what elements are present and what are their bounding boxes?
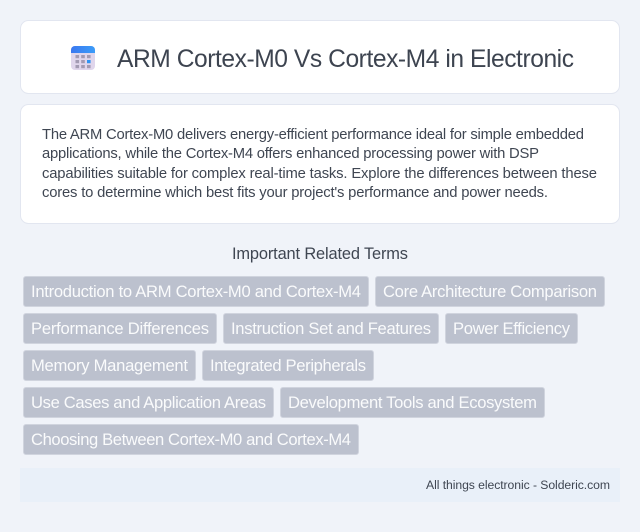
intro paragraph	[42, 127, 597, 201]
tag: memory management: Memory Management	[31, 356, 188, 375]
panel: header	[20, 20, 620, 94]
tag: use cases: Use Cases and Application Areas	[31, 393, 266, 412]
intro paragraph: cores to determine which best fits your project's performance and power needs.	[42, 185, 548, 201]
tag: introduction	[24, 276, 368, 306]
footer	[20, 468, 620, 502]
tag: core architecture: Core Architecture Comparison	[383, 282, 597, 301]
tag: performance	[24, 314, 216, 344]
tag: instruction set: Instruction Set and Features	[231, 319, 431, 338]
panel: intro text	[20, 104, 620, 224]
tag: power efficiency	[446, 314, 578, 344]
intro paragraph: applications, while the Cortex-M4 offers enhanced processing power with DSP	[42, 146, 539, 162]
tag: choosing: Choosing Between Cortex-M0 and Cortex-M4	[31, 430, 351, 449]
tag: power efficiency: Power Efficiency	[453, 319, 571, 338]
tag: introduction: Introduction to ARM Cortex-M0 and Cortex-M4	[31, 282, 361, 301]
title: ARM Cortex-M0 Vs Cortex-M4 in Electronic	[117, 46, 574, 73]
tag: memory management	[24, 350, 196, 380]
intro paragraph: capabilities suitable for complex real-time tasks. Explore the differences between these	[42, 166, 597, 182]
tag list	[24, 276, 604, 454]
tag: core architecture	[376, 276, 604, 306]
tag: integrated peripherals: Integrated Peripherals	[210, 356, 366, 375]
tag: use cases	[24, 388, 274, 418]
tag: development tools: Development Tools and Ecosystem	[288, 393, 537, 412]
footer credit: All things electronic - Solderic.com	[426, 478, 610, 492]
tag: choosing	[24, 424, 358, 454]
intro paragraph: The ARM Cortex-M0 delivers energy-efficient performance ideal for simple embedded	[42, 127, 584, 143]
tag: instruction set	[224, 314, 438, 344]
icon: calendar	[71, 46, 95, 70]
tag: integrated peripherals	[202, 350, 374, 380]
tag: performance: Performance Differences	[31, 319, 209, 338]
tag: development tools	[280, 388, 544, 418]
heading: important related terms: Important Related Terms	[232, 245, 408, 263]
